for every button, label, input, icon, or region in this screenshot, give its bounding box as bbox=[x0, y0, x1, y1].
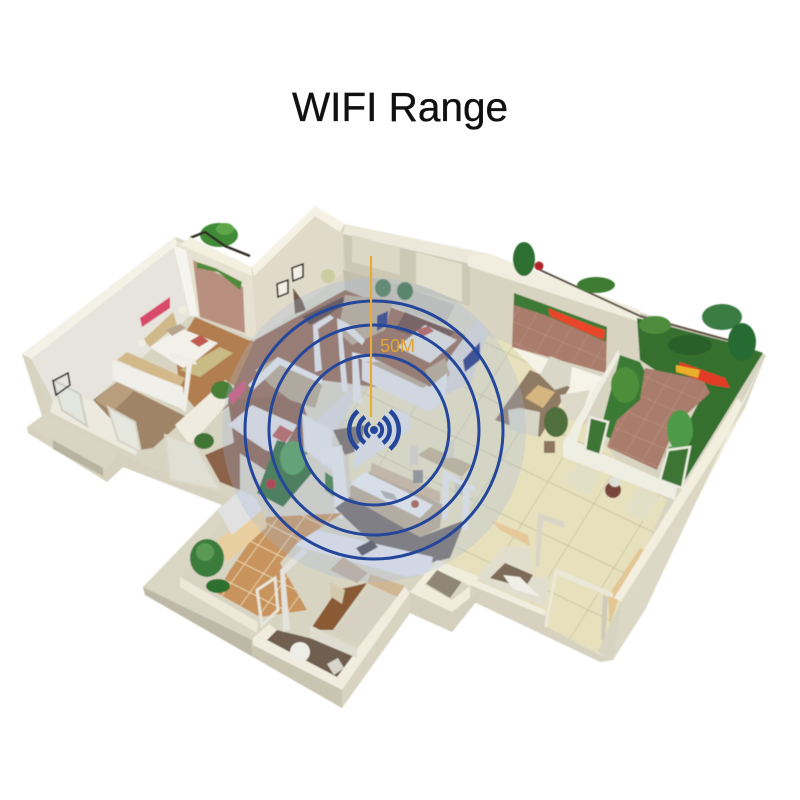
sliding door room bbox=[165, 435, 220, 490]
dark stub floor bbox=[333, 425, 365, 455]
vent slats bbox=[53, 440, 103, 476]
glass screen 1 bbox=[53, 380, 87, 426]
upper bed blanket bbox=[416, 326, 434, 337]
railing bbox=[540, 270, 735, 342]
flowers red bbox=[548, 308, 605, 340]
lamp left bbox=[138, 339, 146, 347]
left arc middle bbox=[358, 417, 365, 443]
central counter stub bbox=[353, 408, 410, 470]
chair c bbox=[413, 470, 423, 483]
bath floor bbox=[267, 630, 357, 677]
bush left rail bbox=[639, 316, 671, 334]
room wall with frames bbox=[252, 214, 343, 340]
notch wall front bbox=[410, 590, 480, 632]
south counter bbox=[293, 527, 433, 577]
nightstand lamps bbox=[138, 306, 187, 347]
toilet bbox=[327, 658, 344, 675]
plant two bbox=[397, 282, 413, 300]
lower left balcony and room bbox=[143, 490, 410, 708]
rug bbox=[180, 347, 233, 377]
range rings bbox=[245, 301, 503, 559]
planter plant low bbox=[206, 579, 230, 593]
window 2 bbox=[416, 252, 462, 302]
planter plant bbox=[190, 539, 224, 577]
plant pot bbox=[544, 441, 555, 453]
kitchen front bbox=[350, 470, 443, 537]
plant highlight bbox=[280, 441, 306, 475]
wifi coverage disk bbox=[222, 278, 526, 582]
bed bbox=[333, 588, 397, 645]
door frame 2 bbox=[337, 318, 365, 392]
small rail bbox=[257, 578, 278, 625]
dark floor bbox=[395, 312, 455, 345]
cabinet top bbox=[365, 361, 428, 388]
bush top bbox=[577, 277, 615, 293]
range label: 50M bbox=[380, 336, 415, 356]
tv wall bbox=[440, 320, 487, 395]
side table bbox=[605, 482, 621, 498]
small room floor bbox=[490, 563, 533, 588]
palm top right bbox=[702, 304, 742, 330]
tan side bench bbox=[608, 548, 647, 625]
ring middle bbox=[269, 325, 479, 535]
chair b bbox=[445, 440, 454, 458]
bed bbox=[150, 328, 218, 368]
wood floor upper rooms bbox=[228, 290, 465, 420]
chair d bbox=[455, 478, 463, 494]
desk bbox=[302, 297, 345, 325]
plant on roof left bbox=[190, 223, 250, 256]
wooden bar bbox=[370, 463, 440, 503]
arch opening pink tile bbox=[193, 260, 245, 333]
terrace arch wall bbox=[176, 240, 257, 340]
flower bed bbox=[678, 362, 730, 388]
ring inner bbox=[299, 355, 449, 505]
door frame 3 bbox=[352, 352, 375, 405]
bathroom check floor bbox=[93, 382, 187, 450]
room dividing wall bbox=[310, 625, 357, 658]
mid notch room bbox=[425, 567, 463, 598]
front terrace wall bbox=[27, 422, 235, 510]
icon: wifi signal bbox=[349, 411, 399, 449]
bath and lower wall bbox=[50, 400, 140, 455]
yellow flowers bbox=[676, 365, 700, 378]
window 1 bbox=[352, 235, 400, 275]
night table bbox=[425, 358, 450, 388]
tiled floor bbox=[345, 335, 667, 653]
terrace low wall bbox=[563, 350, 677, 500]
main living area bbox=[468, 254, 660, 625]
left arc large bbox=[349, 411, 358, 449]
outer side wall bbox=[253, 645, 342, 708]
dark floor south bbox=[335, 497, 465, 570]
coffee table bbox=[525, 385, 555, 408]
headboard bbox=[143, 312, 177, 347]
bedroom back wall bbox=[30, 247, 190, 400]
window wall bbox=[343, 226, 470, 306]
bed blanket bbox=[190, 335, 209, 347]
kitchen top bbox=[350, 472, 433, 518]
small room basin counter bbox=[503, 575, 540, 597]
chair a bbox=[410, 445, 418, 465]
foliage light bbox=[216, 223, 234, 235]
cluster b bbox=[667, 410, 693, 450]
dining chairs bbox=[410, 440, 463, 494]
signal dot bbox=[370, 426, 378, 434]
left wing bedroom bbox=[22, 237, 270, 510]
tile terrace bbox=[217, 513, 343, 617]
tan sideboard bbox=[491, 520, 530, 546]
planter wall bbox=[180, 577, 258, 633]
bed blanket centre bbox=[272, 425, 293, 443]
wood bit bbox=[205, 440, 240, 490]
bench top bbox=[117, 352, 185, 387]
plant one bbox=[375, 279, 391, 297]
palm right side bbox=[728, 323, 756, 361]
glass frame b bbox=[660, 447, 690, 488]
glass door frame bbox=[170, 352, 197, 412]
low white pillars bbox=[320, 445, 348, 520]
red flowers bbox=[266, 479, 276, 489]
desk bbox=[330, 557, 368, 583]
roof garden bbox=[513, 242, 766, 660]
front planter top bbox=[27, 415, 120, 470]
balcony edge bbox=[143, 587, 253, 657]
tan bench bbox=[217, 507, 267, 563]
small tv bbox=[377, 311, 388, 331]
door opening frame bbox=[535, 513, 565, 567]
lamp right bbox=[179, 306, 187, 314]
painting centre bbox=[228, 380, 245, 405]
foliage bbox=[200, 223, 238, 247]
bedroom wood floor bbox=[175, 317, 270, 420]
top tree flower bbox=[534, 262, 544, 270]
wall top edge bbox=[252, 206, 345, 276]
garden greens bbox=[637, 318, 763, 483]
armchair left bbox=[567, 463, 600, 495]
small room walls bbox=[470, 547, 550, 607]
small plant bbox=[211, 381, 233, 399]
right arc large bbox=[390, 411, 399, 449]
small room wall top bbox=[470, 578, 545, 616]
chair bbox=[330, 582, 345, 604]
left arc small bbox=[366, 423, 370, 437]
vase and flowers bbox=[321, 269, 335, 283]
garden clusters bbox=[611, 335, 712, 474]
wall pillar bbox=[218, 490, 262, 535]
apartment floor plan bbox=[22, 206, 766, 708]
cluster a bbox=[611, 367, 639, 403]
dining glass door bbox=[442, 470, 475, 530]
room outer wall top bbox=[253, 585, 410, 690]
right wall side shadow bbox=[613, 355, 766, 660]
lower wing wood bbox=[228, 395, 318, 470]
balcony floor bbox=[143, 507, 258, 640]
glass screen 2 bbox=[108, 407, 141, 452]
arch greenery bbox=[197, 262, 242, 290]
light check tile bbox=[95, 382, 134, 412]
pillars bbox=[280, 548, 308, 632]
wall end cap bbox=[22, 354, 50, 416]
sofa long bbox=[560, 390, 590, 420]
painting: red art bbox=[140, 297, 170, 327]
sink bbox=[380, 490, 398, 501]
wardrobe frame bbox=[248, 357, 322, 390]
right arc small bbox=[378, 423, 382, 437]
small south room bbox=[410, 547, 613, 662]
vanity counter bbox=[175, 380, 240, 445]
small green bbox=[325, 472, 340, 500]
plants by sill bbox=[375, 279, 413, 300]
frame icon bbox=[53, 373, 70, 395]
centre bedroom bed bbox=[228, 405, 297, 455]
small tv niche bbox=[338, 295, 393, 345]
plant under door bbox=[194, 433, 214, 449]
notch wall top bbox=[410, 560, 480, 612]
sofa group rug bbox=[495, 370, 570, 437]
wall top edge bbox=[22, 237, 178, 360]
cooktop bbox=[356, 540, 378, 556]
garden left strip bbox=[600, 355, 652, 440]
right arc middle bbox=[383, 417, 390, 443]
terrace tile bbox=[607, 368, 710, 470]
door frame 1 bbox=[313, 315, 334, 372]
armchair top bbox=[540, 356, 572, 390]
window sill bbox=[343, 270, 455, 325]
lintel bbox=[343, 224, 490, 264]
chair bbox=[293, 288, 306, 314]
iron railing bbox=[190, 232, 250, 256]
white partition bbox=[112, 360, 185, 410]
plate of fruit bbox=[411, 500, 419, 508]
title: WIFI Range bbox=[292, 84, 508, 130]
dining table bbox=[418, 447, 472, 477]
column highlight bbox=[173, 245, 198, 316]
right side wall bbox=[342, 593, 410, 708]
range line bbox=[370, 256, 372, 417]
white flowers bbox=[609, 475, 621, 487]
building silhouette bbox=[22, 206, 766, 708]
opening tile bbox=[512, 293, 607, 373]
armchair bottom bbox=[508, 408, 540, 437]
wall top bbox=[468, 254, 640, 322]
wall top: terrace bbox=[180, 237, 252, 276]
door post bbox=[601, 595, 608, 640]
large tv bbox=[463, 342, 480, 372]
potted plant bbox=[544, 407, 568, 437]
bed pillows bbox=[166, 324, 186, 336]
headboard bbox=[367, 574, 405, 597]
right wall band bbox=[614, 398, 745, 610]
garden well bbox=[257, 440, 312, 507]
room floor wood bbox=[310, 583, 367, 630]
top tree left bbox=[513, 242, 535, 276]
glass frame a bbox=[585, 417, 608, 455]
sink bbox=[290, 642, 310, 662]
glare under opening bbox=[512, 347, 606, 420]
wall with terrace opening bbox=[470, 262, 640, 380]
cluster d bbox=[664, 446, 680, 474]
partition wall bbox=[307, 390, 353, 440]
door frame lower bbox=[544, 568, 613, 627]
glass door bbox=[303, 415, 332, 470]
cluster c bbox=[668, 335, 712, 355]
frame 1 bbox=[277, 280, 288, 297]
opening flowers bbox=[514, 293, 607, 342]
centre bedroom wardrobe bbox=[255, 357, 322, 408]
small room front wall bbox=[470, 585, 613, 662]
upper bed bbox=[397, 325, 457, 363]
frame 2 bbox=[292, 264, 303, 281]
central wing bbox=[228, 206, 667, 653]
planter plant highlight bbox=[196, 543, 214, 561]
ring outer bbox=[245, 301, 503, 559]
low cabinet front bbox=[362, 357, 447, 412]
armchair right bbox=[624, 486, 660, 522]
